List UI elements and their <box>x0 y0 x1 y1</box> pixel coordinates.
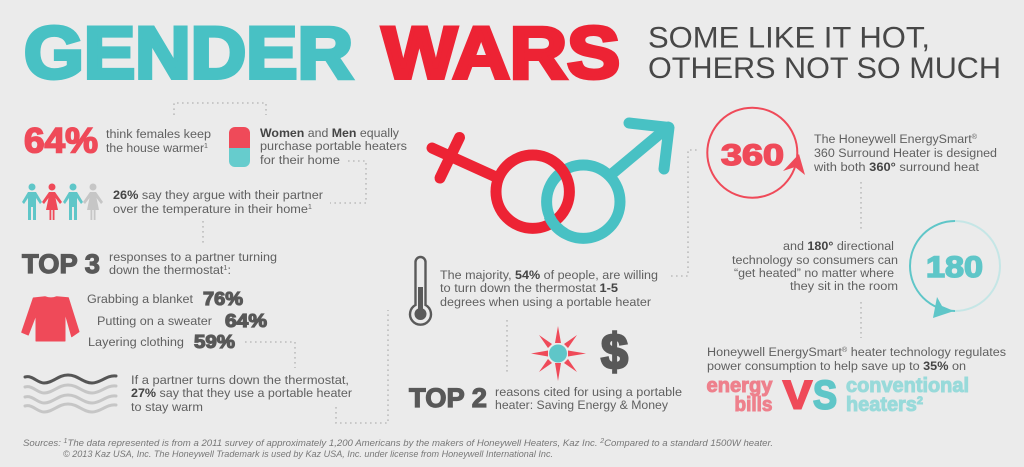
text: 27 percent: to stay warm <box>131 400 203 414</box>
title: WARS <box>382 13 620 94</box>
text: 360 surround <box>813 132 997 174</box>
list: responses <box>87 289 267 352</box>
subtitle <box>648 22 1001 85</box>
comparison: energy bills vs conventional heaters: S <box>813 374 837 418</box>
comparison: energy bills vs conventional heaters: 2 <box>917 395 923 407</box>
text: women and men: Women and Men equally <box>260 126 400 140</box>
text: majority 54 percent: degrees when using a portable heater <box>440 295 651 309</box>
text: 180 directional <box>732 239 898 293</box>
icon: sun <box>531 326 586 381</box>
icon: 360 circle: 360 <box>721 139 784 172</box>
icon: 180 circle <box>910 221 1000 318</box>
icon: gender symbols <box>432 123 669 238</box>
title <box>24 13 620 94</box>
text: 360 surround: with both 360° surround heat <box>813 160 980 174</box>
stat: 64 percent: the house warmer <box>106 141 204 155</box>
text: 180 directional: they sit in the room <box>790 279 898 293</box>
sources footnote <box>23 438 773 460</box>
text: majority 54 percent: to turn down the thermostat 1-5 <box>440 281 618 295</box>
heading: top 2 <box>409 383 682 413</box>
text: power consumption <box>707 345 1006 373</box>
stat: 64 percent <box>24 122 211 160</box>
icon: sweater <box>22 297 79 341</box>
list: responses: Grabbing a blanket <box>87 292 194 306</box>
icon: half red half teal bar <box>229 127 250 167</box>
list: responses: Layering clothing <box>88 335 184 349</box>
text: power consumption: power consumption to help save up to 35% on <box>707 359 966 373</box>
stat: 64 percent: think females keep <box>106 127 211 141</box>
icon: thermometer <box>410 257 431 325</box>
heading: top 3: down the thermostat <box>109 263 219 277</box>
text: 360 surround: ® <box>972 133 978 141</box>
text: women and men: purchase portable heaters <box>260 139 407 153</box>
heading: top 2: reasons cited for using a portable <box>495 385 682 399</box>
comparison: energy bills vs conventional heaters: conventional <box>846 375 969 397</box>
stat: 64 percent: 64% <box>24 122 98 160</box>
text: 180 directional: technology so consumers can <box>732 253 898 267</box>
heading: top 2: TOP 2 <box>409 383 487 413</box>
list: responses: Putting on a sweater <box>97 314 212 328</box>
comparison: energy bills vs conventional heaters: bills <box>734 394 772 416</box>
title: GENDER <box>24 13 353 94</box>
text: 180 directional: “get heated” no matter where <box>734 266 894 280</box>
list: responses: 59% <box>194 332 235 352</box>
text: women and men: for their home <box>260 153 340 167</box>
text: women and men <box>260 126 407 167</box>
sources footnote: Compared to a standard 1500W heater. <box>604 438 773 449</box>
icon: four people <box>22 184 103 220</box>
text: 27 percent <box>131 373 352 414</box>
heading: top 3 <box>22 249 277 279</box>
comparison: energy bills vs conventional heaters: heaters <box>846 394 917 416</box>
heading: top 2: heater: Saving Energy & Money <box>495 398 669 412</box>
text: 26 percent argue: 26% say they argue with their partner <box>113 188 323 202</box>
icon: dollar sign: $ <box>601 324 628 380</box>
subtitle: OTHERS NOT SO MUCH <box>648 52 1001 85</box>
text: 360 surround: 360 Surround Heater is designed <box>814 146 997 160</box>
sources footnote: 2 <box>599 438 604 445</box>
list: responses: 76% <box>203 289 243 309</box>
heading: top 3: : <box>227 263 231 277</box>
icon: 360 circle <box>707 108 805 198</box>
text: majority 54 percent: The majority, 54% of people, are willing <box>440 268 658 282</box>
heading: top 3: responses to a partner turning <box>109 250 277 264</box>
text: 27 percent: 27% say that they use a portable heater <box>131 386 352 400</box>
subtitle: SOME LIKE IT HOT, <box>648 22 930 54</box>
text: power consumption: heater technology regulates <box>847 345 1006 359</box>
text: power consumption: Honeywell EnergySmart <box>707 345 838 359</box>
text: 26 percent argue: over the temperature in their home <box>113 202 300 216</box>
text: power consumption: ® <box>842 346 848 354</box>
text: 180 directional: and 180° directional <box>783 239 894 253</box>
icon: 180 circle: 180 <box>926 251 983 284</box>
text: 26 percent argue: 1 <box>308 204 312 211</box>
sources footnote: © 2013 Kaz USA, Inc. The Honeywell Trademark is used by Kaz USA, Inc. under license from Honeywell International Inc. <box>63 449 553 460</box>
heading: top 3: 1 <box>223 265 228 272</box>
text: 360 surround: The Honeywell EnergySmart <box>814 132 969 146</box>
stat: 64 percent: 1 <box>204 143 208 150</box>
comparison: energy bills vs conventional heaters: energy <box>706 375 773 397</box>
comparison: energy bills vs conventional heaters: V <box>783 374 812 418</box>
sources footnote: 1 <box>64 438 68 445</box>
comparison: energy bills vs conventional heaters <box>706 374 969 418</box>
heading: top 3: TOP 3 <box>22 249 100 279</box>
sources footnote: The data represented is from a 2011 survey of approximately 1,200 Americans by the makers of Honeywell Heaters, Kaz Inc. <box>67 438 600 449</box>
text: majority 54 percent <box>440 268 658 309</box>
icon: heat waves <box>25 375 116 412</box>
text: 27 percent: If a partner turns down the thermostat, <box>131 373 349 387</box>
text: 26 percent argue <box>113 188 323 216</box>
sources footnote: Sources: <box>23 438 61 449</box>
list: responses: 64% <box>225 311 267 331</box>
